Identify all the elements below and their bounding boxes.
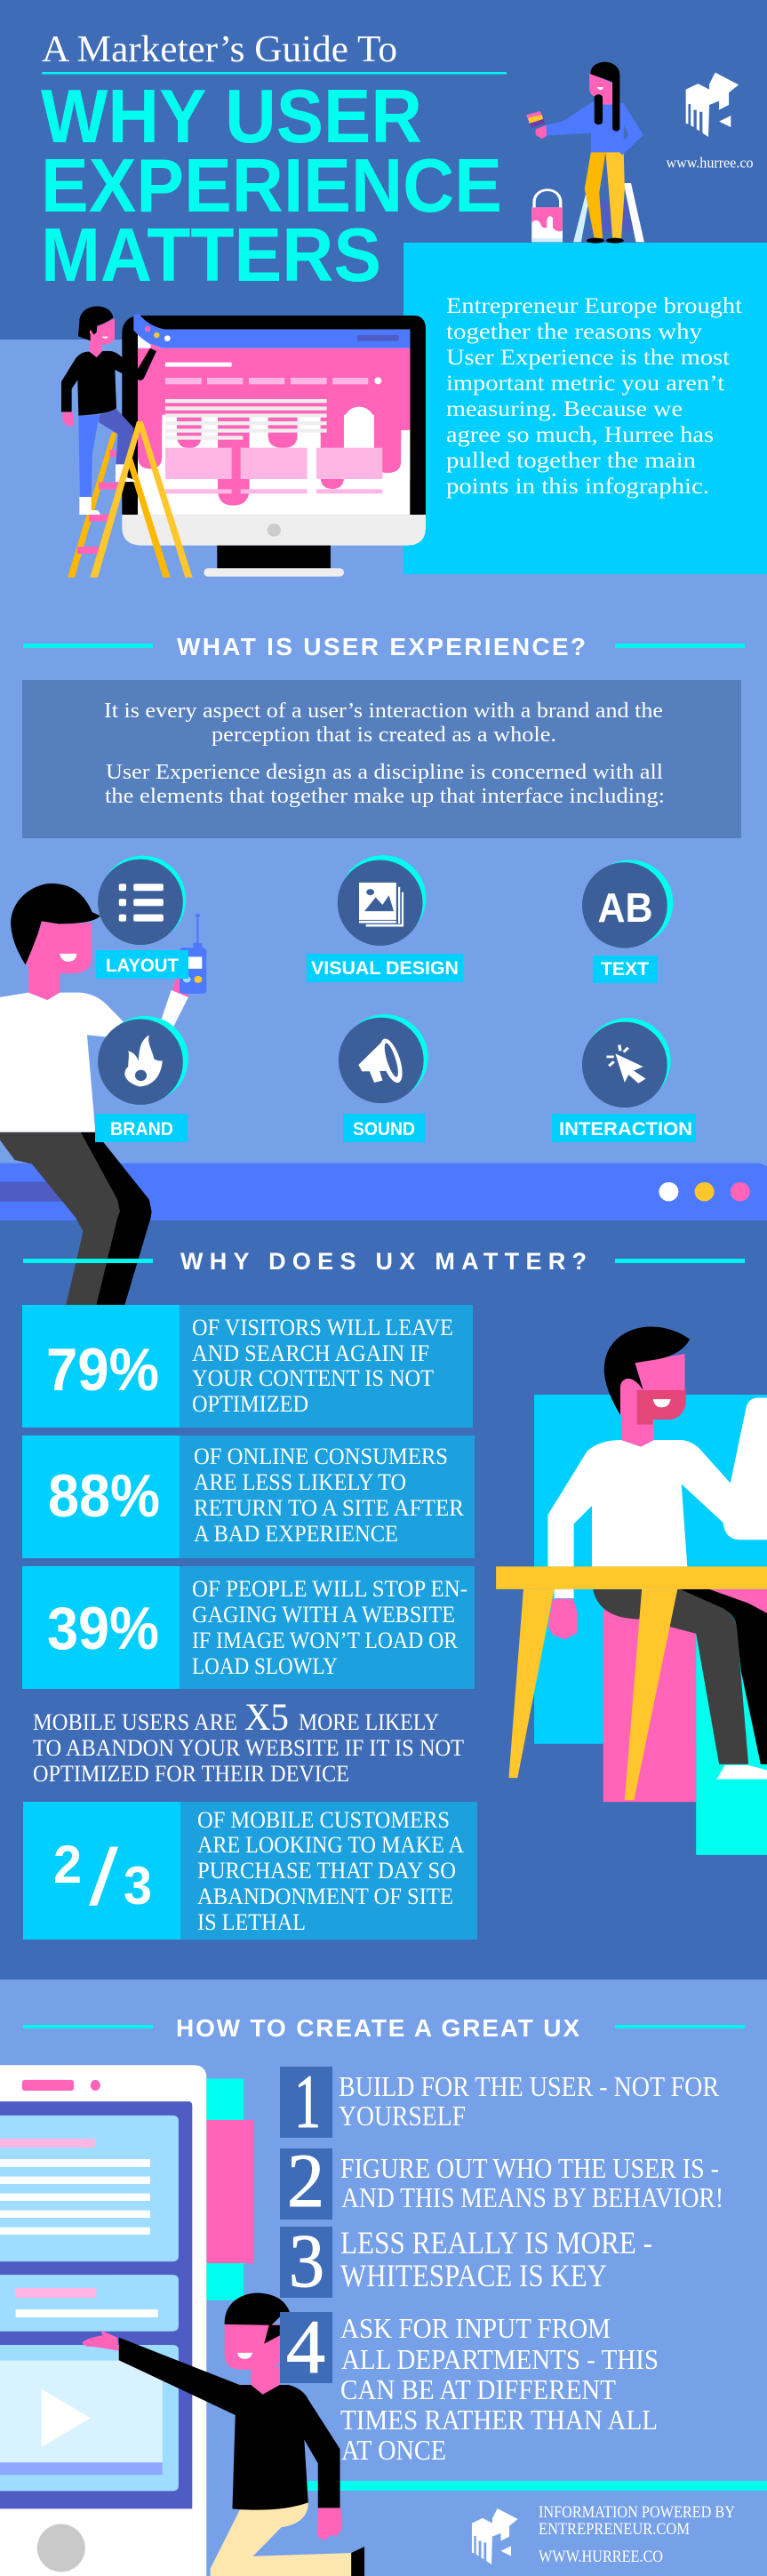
label: sound: SOUND <box>353 1119 415 1140</box>
ladder back legs and rungs <box>68 433 171 578</box>
footer credits: INFORMATION POWERED BY <box>539 2503 735 2522</box>
step 1: 1 <box>294 2059 321 2144</box>
step 1: YOURSELF <box>339 2100 466 2132</box>
stat: 39%: 39% <box>47 1595 159 1662</box>
heading: why does ux matter: WHY DOES UX MATTER? <box>180 1248 587 1275</box>
icon: text <box>582 860 673 948</box>
panel: definition: perception that is created as a whole. <box>212 724 556 747</box>
stat: 88%: OF ONLINE CONSUMERS <box>194 1444 448 1469</box>
panel: intro <box>403 243 767 574</box>
step 2 <box>280 2138 723 2223</box>
stat: 2/3: 2 <box>53 1835 82 1894</box>
stat: 2/3: IS LETHAL <box>197 1909 306 1935</box>
label: layout: LAYOUT <box>106 956 179 976</box>
label: brand <box>95 1114 188 1142</box>
step 1 <box>280 2059 720 2144</box>
panel: definition <box>22 680 741 838</box>
panel: intro: points in this infographic. <box>446 475 709 499</box>
step 3: WHITESPACE IS KEY <box>340 2258 607 2293</box>
icon: interaction <box>582 1018 671 1108</box>
illustration: phone screen <box>0 2065 254 2576</box>
logo: hurree <box>686 73 739 137</box>
step 3: 3 <box>289 2218 324 2303</box>
title block <box>41 29 507 298</box>
stat: 79% <box>22 1305 473 1428</box>
label: interaction: INTERACTION <box>559 1119 692 1140</box>
panel: intro: User Experience is the most <box>446 346 730 370</box>
heading: why does ux matter <box>23 1248 745 1275</box>
panel: intro: measuring. Because we <box>446 397 683 421</box>
label: text: TEXT <box>601 959 649 980</box>
stat: 2/3 <box>23 1802 477 1940</box>
label: visual design: VISUAL DESIGN <box>311 958 459 979</box>
icon: visual design <box>338 855 426 946</box>
step 3 <box>280 2218 652 2303</box>
panel: intro: pulled together the main <box>446 449 697 473</box>
stat: 2/3: ARE LOOKING TO MAKE A <box>197 1832 464 1858</box>
stat: 39%: IF IMAGE WON’T LOAD OR <box>192 1628 459 1653</box>
ladder front legs <box>90 421 193 578</box>
panel: intro: agree so much, Hurree has <box>446 423 714 447</box>
icon: layout <box>98 856 186 945</box>
illustration: woman painting <box>526 62 644 244</box>
title block: EXPERIENCE <box>41 144 502 228</box>
stat: 39%: LOAD SLOWLY <box>192 1653 338 1679</box>
step 4: 4 <box>286 2304 325 2389</box>
logo url: www.hurree.co <box>667 155 754 171</box>
step 4 <box>280 2304 659 2466</box>
title block: MATTERS <box>41 213 381 298</box>
icon: brand <box>98 1016 188 1105</box>
footer credits <box>539 2503 735 2566</box>
stat: 2/3: / <box>89 1834 118 1923</box>
callout: mobile users: X5 <box>244 1697 289 1739</box>
callout: mobile users: TO ABANDON YOUR WEBSITE IF IT IS NOT <box>33 1735 464 1761</box>
callout: mobile users: MORE LIKELY <box>299 1709 439 1735</box>
stat: 79%: 79% <box>46 1336 159 1404</box>
illustration: man at table <box>496 1326 767 1855</box>
panel: definition: It is every aspect of a user’s interaction with a brand and the <box>104 700 663 723</box>
panel: intro: together the reasons why <box>446 320 703 344</box>
callout: mobile users: MOBILE USERS ARE <box>33 1709 237 1735</box>
callout: mobile users: OPTIMIZED FOR THEIR DEVICE <box>33 1761 349 1787</box>
panel: intro: Entrepreneur Europe brought <box>446 294 742 318</box>
step 3: LESS REALLY IS MORE - <box>340 2225 652 2260</box>
step 4: CAN BE AT DIFFERENT <box>340 2373 616 2405</box>
illustration: man with walkie-talkie <box>0 884 206 1305</box>
logo: footer <box>472 2508 518 2564</box>
step 4: AT ONCE <box>341 2434 446 2466</box>
icon: sound <box>339 1014 428 1103</box>
footer bar <box>306 2481 767 2491</box>
stat: 39%: OF PEOPLE WILL STOP EN- <box>192 1576 467 1602</box>
footer credits: WWW.HURREE.CO <box>539 2548 663 2566</box>
nav bar with dots <box>0 1164 767 1220</box>
step 2: 2 <box>287 2138 324 2223</box>
stat: 2/3: PURCHASE THAT DAY SO <box>197 1858 456 1884</box>
label: interaction <box>552 1114 696 1142</box>
label: text <box>593 956 658 983</box>
stat: 2/3: 3 <box>124 1856 152 1916</box>
heading: how to create a great ux: HOW TO CREATE A GREAT UX <box>176 2014 579 2042</box>
step 2: FIGURE OUT WHO THE USER IS - <box>340 2152 719 2184</box>
label: layout <box>96 950 188 979</box>
stat: 39% <box>22 1566 475 1689</box>
illustration: monitor with painter on ladder <box>61 307 426 578</box>
title block: WHY USER <box>41 75 422 159</box>
panel: definition: User Experience design as a discipline is concerned with all <box>106 761 663 784</box>
heading: what is user experience: WHAT IS USER EXPERIENCE? <box>177 633 586 660</box>
label: brand: BRAND <box>110 1119 173 1140</box>
stat: 79%: OF VISITORS WILL LEAVE <box>192 1315 453 1340</box>
step 4: ASK FOR INPUT FROM <box>340 2312 611 2344</box>
stat: 79%: OPTIMIZED <box>192 1391 308 1417</box>
icon: text: AB <box>597 884 652 931</box>
heading: how to create a great ux <box>23 2014 745 2042</box>
stat: 79%: YOUR CONTENT IS NOT <box>192 1365 434 1391</box>
stat: 88%: RETURN TO A SITE AFTER <box>194 1495 465 1521</box>
label: visual design <box>307 954 463 982</box>
panel: intro: important metric you aren’t <box>446 372 724 396</box>
monitor frame <box>122 316 426 515</box>
painter figure <box>61 307 160 515</box>
stat: 2/3: OF MOBILE CUSTOMERS <box>197 1807 450 1833</box>
label: sound <box>343 1114 425 1142</box>
callout: mobile users <box>33 1697 464 1787</box>
stat: 79%: AND SEARCH AGAIN IF <box>192 1340 429 1366</box>
footer credits: ENTREPRENEUR.COM <box>539 2520 690 2539</box>
step 4: ALL DEPARTMENTS - THIS <box>341 2343 659 2375</box>
step 4: TIMES RATHER THAN ALL <box>340 2404 658 2436</box>
stat: 88% <box>22 1436 475 1558</box>
stat: 39%: GAGING WITH A WEBSITE <box>192 1602 455 1628</box>
stat: 88%: ARE LESS LIKELY TO <box>194 1469 406 1495</box>
title block: A Marketer’s Guide To <box>42 29 397 70</box>
stat: 88%: 88% <box>48 1462 160 1530</box>
stat: 2/3: ABANDONMENT OF SITE <box>197 1884 453 1909</box>
step 1: BUILD FOR THE USER - NOT FOR <box>339 2070 720 2102</box>
stat: 88%: A BAD EXPERIENCE <box>194 1521 398 1547</box>
heading: what is user experience <box>23 633 745 660</box>
illustration: man pointing at phone <box>82 2293 364 2576</box>
panel: definition: the elements that together make up that interface including: <box>105 785 665 808</box>
